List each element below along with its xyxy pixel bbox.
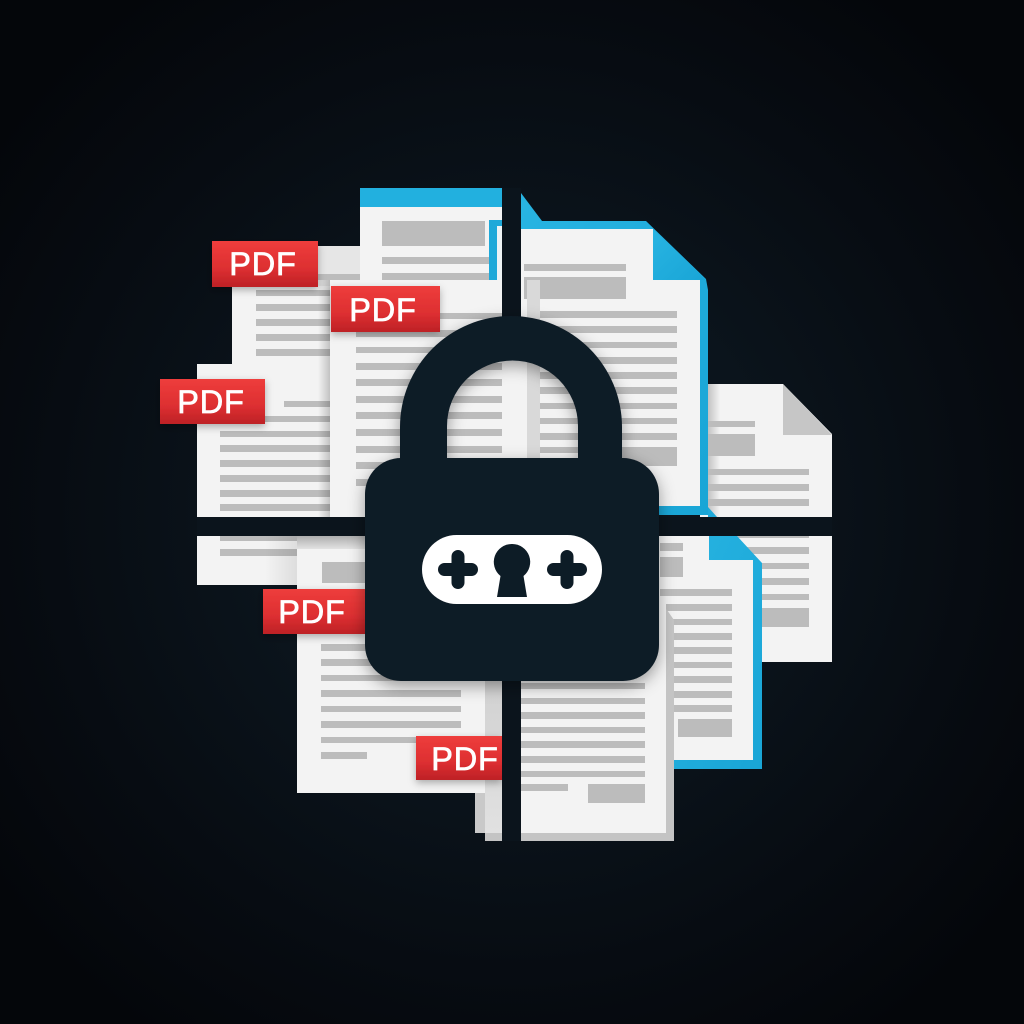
document: blue-topped page, upper centre	[360, 188, 502, 288]
label: PDF tag lower centre: PDF	[431, 741, 499, 777]
label: PDF tag top centre	[331, 286, 440, 332]
document: lower left page	[297, 536, 502, 841]
label: PDF tag lower centre	[416, 736, 502, 780]
plus symbol left	[438, 550, 478, 589]
document: left page	[197, 364, 337, 517]
label: PDF tag top left: PDF	[229, 246, 297, 282]
padlock	[365, 316, 659, 681]
label: PDF tag top left	[212, 241, 318, 287]
central vertical gap	[502, 188, 521, 841]
label: PDF tag lower left	[263, 589, 365, 634]
padlock shackle	[400, 316, 622, 470]
document: short left strip below divider	[197, 536, 307, 585]
page seen through the shackle opening	[502, 340, 527, 465]
document: centre left page	[318, 280, 502, 517]
keyhole plate	[422, 535, 602, 604]
plus symbol right	[547, 550, 587, 589]
central horizontal gap	[197, 517, 832, 536]
keyhole	[494, 544, 530, 597]
document: lower right page	[521, 600, 674, 841]
document: blue-edged page, lower right	[659, 536, 762, 769]
label: PDF tag middle left: PDF	[177, 384, 245, 420]
padlock body	[365, 458, 659, 681]
document: right small page with grey fold	[700, 384, 832, 517]
label: PDF tag top centre: PDF	[349, 292, 417, 328]
document: far right page below divider	[730, 536, 832, 662]
document: back left page	[232, 246, 360, 366]
label: PDF tag middle left	[160, 379, 265, 424]
label: PDF tag lower left: PDF	[278, 594, 346, 630]
document: blue-edged page, upper right	[521, 193, 717, 517]
